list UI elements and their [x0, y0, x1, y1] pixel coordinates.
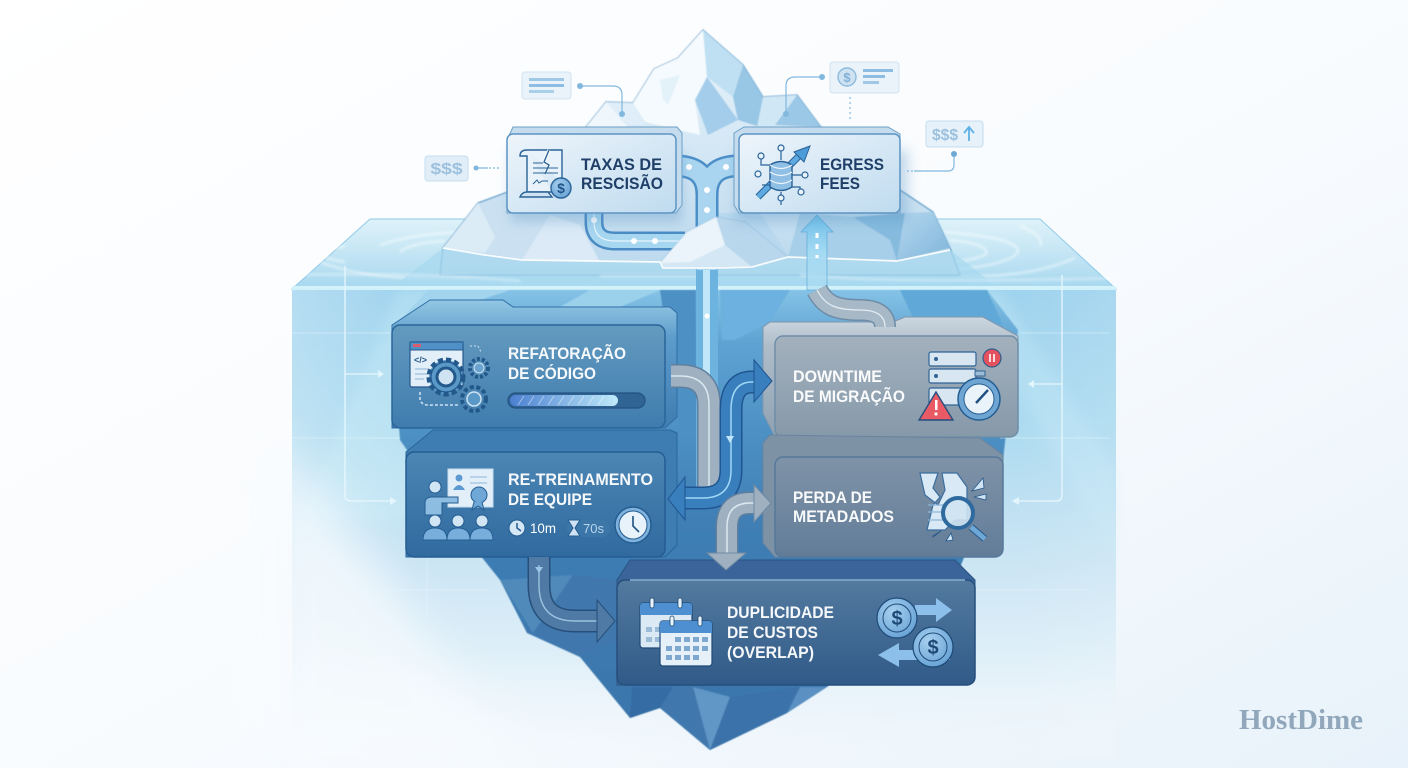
- heading: [727, 603, 834, 662]
- iceberg above water: [440, 30, 960, 275]
- heading: PERDA DE: [793, 488, 872, 507]
- heading: (OVERLAP): [727, 643, 814, 662]
- card shadow top: [510, 150, 908, 222]
- heading: DUPLICIDADE: [727, 603, 834, 622]
- icon: database with arrow: [755, 145, 810, 205]
- heading: TAXAS DE: [581, 155, 662, 174]
- time stats: [509, 520, 610, 537]
- heading: FEES: [820, 174, 860, 193]
- pipe: top blue connector: [591, 164, 738, 270]
- icon: coins and arrows: $: [927, 637, 939, 659]
- icon: coins and arrows: [877, 598, 953, 667]
- heading: DE EQUIPE: [508, 490, 592, 509]
- arrow: blue S connector: [668, 360, 772, 520]
- arrow: gray to team: [671, 376, 709, 490]
- heading: [508, 470, 653, 509]
- progress bar: [508, 393, 645, 408]
- icon: code and gears: [410, 342, 488, 411]
- icon: calendars: [640, 598, 712, 666]
- arrow: up to egress: [801, 215, 833, 290]
- arrow: gray from water to downtime: [817, 290, 885, 327]
- chip: $$$ left: [425, 156, 501, 181]
- heading: DE CÓDIGO: [508, 364, 596, 383]
- card: refatoração de código: [392, 300, 677, 428]
- arrow: lower left to duplicidade: [535, 557, 615, 642]
- icon: contract: $: [557, 180, 565, 196]
- chip: text lines left: [522, 72, 625, 117]
- brand logo: HostDime: [1239, 704, 1363, 736]
- heading: [793, 488, 894, 526]
- heading: EGRESS: [820, 155, 884, 174]
- heading: [581, 155, 663, 193]
- heading: DOWNTIME: [793, 367, 882, 386]
- iceberg front hump: [660, 217, 788, 268]
- heading: REFATORAÇÃO: [508, 343, 626, 363]
- heading: RE-TREINAMENTO: [508, 470, 653, 489]
- heading: DE MIGRAÇÃO: [793, 386, 905, 406]
- card: taxas de rescisão: [507, 127, 682, 213]
- chip: coin lines right: $: [843, 70, 851, 85]
- icon: broken document: [920, 473, 986, 541]
- arrow: gray fork: [727, 485, 771, 553]
- chip: $$$ left: $$$: [430, 161, 463, 178]
- heading: [820, 155, 884, 193]
- chip: $$$ up right: [905, 121, 983, 171]
- icon: clock: [615, 507, 651, 543]
- icon: code and gears: </>: [414, 355, 427, 365]
- heading: [508, 343, 626, 383]
- icon: server with stopwatch: [919, 349, 1001, 420]
- time stats: 70s: [583, 521, 604, 536]
- card: downtime de migração: [763, 317, 1018, 437]
- card: re-treinamento de equipe: [406, 430, 677, 557]
- water front face: [270, 286, 1116, 768]
- card: perda de metadados: [763, 435, 1003, 557]
- submerged iceberg: [392, 290, 1018, 750]
- card: egress fees: [734, 127, 900, 213]
- icon: contract: [520, 150, 571, 198]
- pipe: vertical submerged: [696, 270, 718, 495]
- time stats: 10m: [530, 520, 556, 536]
- card: duplicidade de custos: [617, 553, 975, 685]
- chip: $$$ up right: $$$: [932, 127, 958, 144]
- grid and flow lines: [292, 266, 1110, 620]
- icon: training: [423, 469, 493, 540]
- water surface: [292, 219, 1116, 289]
- chip: coin lines right: [783, 62, 899, 122]
- heading: DE CUSTOS: [727, 623, 818, 642]
- heading: METADADOS: [793, 507, 894, 526]
- icon: coins and arrows: $: [891, 608, 903, 630]
- water surface over iceberg: [292, 248, 1116, 289]
- heading: [793, 367, 905, 406]
- heading: RESCISÃO: [581, 173, 663, 193]
- arrow head: fork down: [707, 553, 746, 570]
